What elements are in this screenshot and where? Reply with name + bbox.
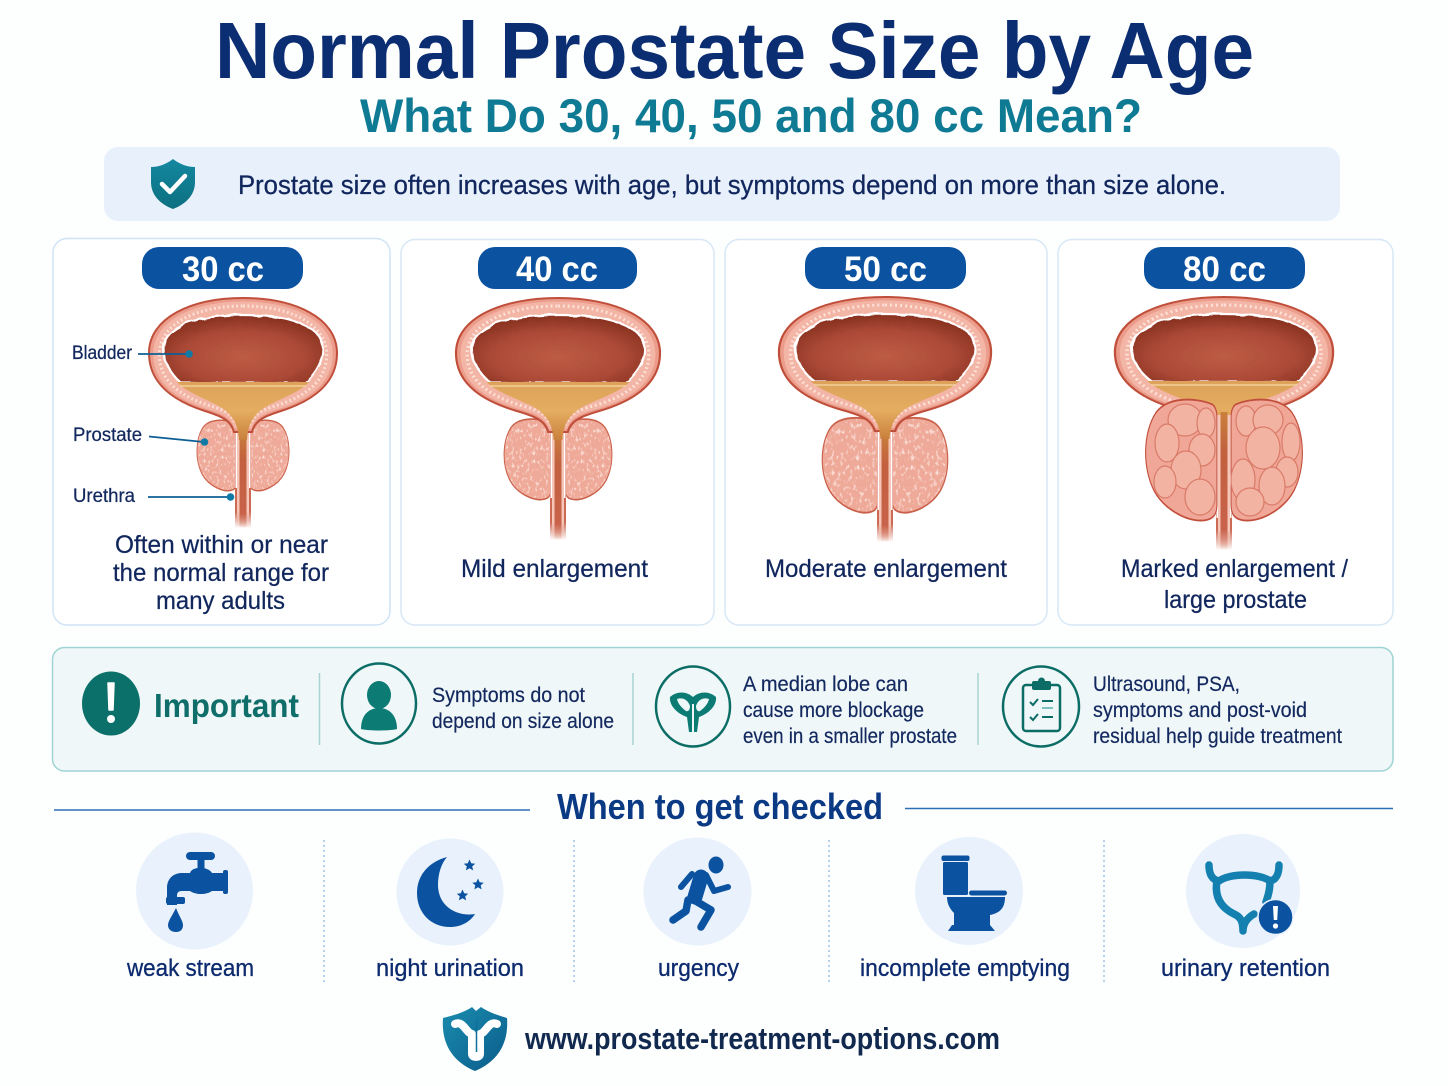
panel: 80 cc [1058,240,1393,625]
badge: 30 cc: 30 cc [182,250,264,289]
caption: 50 cc: Moderate enlargement [765,555,1007,583]
label: prostate: Prostate [73,425,142,446]
label: night urination [376,955,524,982]
heading: when to get checked: When to get checked [557,786,883,827]
text: diagnostics: residual help guide treatment [1093,725,1342,748]
label: urethra: Urethra [73,486,135,507]
label: urgency [658,955,739,982]
icon: logo shield [443,1007,507,1071]
caption: 80 cc: large prostate [1164,586,1307,614]
badge: 30 cc [142,247,303,289]
title: Normal Prostate Size by Age [215,6,1254,95]
symptom: weak stream [126,832,254,982]
label: urethra [73,486,234,507]
footer [443,1007,1000,1071]
text: symptoms: depend on size alone [432,710,614,733]
illustration: 30 cc prostate [149,298,337,528]
badge: 40 cc: 40 cc [516,250,598,289]
text: symptoms: Symptoms do not [432,684,585,707]
text: diagnostics: Ultrasound, PSA, [1093,673,1240,696]
caption: 30 cc: many adults [156,587,285,615]
icon: median lobe [656,666,730,746]
text: median lobe: A median lobe can [743,673,908,696]
illustration: 40 cc prostate [456,298,660,540]
icon: runner [644,838,752,946]
symptom: night urination [376,838,524,982]
illustration: 50 cc prostate [779,297,991,542]
badge: 50 cc: 50 cc [844,250,927,289]
icon: faucet [136,832,253,950]
badge: 80 cc [1144,247,1305,289]
label: weak stream [126,955,254,982]
icon: toilet [915,837,1023,945]
caption: 30 cc: the normal range for [113,559,329,587]
symptom: incomplete emptying [860,837,1070,982]
label: incomplete emptying [860,955,1070,982]
text: diagnostics [1093,673,1342,748]
panel: 30 cc [53,238,390,625]
label: prostate [73,425,208,446]
subtitle: What Do 30, 40, 50 and 80 cc Mean? [360,89,1142,142]
icon: shield check [151,159,195,209]
icon: clipboard [1003,666,1079,746]
key message banner [104,147,1340,221]
text: median lobe: even in a smaller prostate [743,725,957,748]
label: bladder [72,343,193,364]
label: urinary retention [1161,955,1330,982]
text: symptoms [432,684,614,733]
panel: important [52,648,1393,771]
caption: 80 cc: Marked enlargement / [1121,555,1348,583]
panel: 50 cc [725,240,1047,625]
panel: 40 cc [401,240,714,625]
label: bladder: Bladder [72,343,133,364]
caption: 30 cc: Often within or near [115,531,328,559]
icon: moon and stars [396,838,504,946]
caption: 30 cc [113,531,329,615]
symptom: urgency [644,838,752,982]
text: diagnostics: symptoms and post-void [1093,699,1307,722]
icon: person [342,664,416,744]
caption: 80 cc [1121,555,1348,614]
text: median lobe: cause more blockage [743,699,924,722]
icon: bladder alert [1186,834,1300,948]
text: median lobe [743,673,957,748]
symptom: urinary retention [1161,834,1330,982]
badge: 50 cc [805,247,966,289]
badge: 80 cc: 80 cc [1183,250,1266,289]
caption: 40 cc: Mild enlargement [461,555,648,583]
heading: important: Important [154,687,299,724]
illustration: 80 cc prostate [1115,297,1333,550]
icon: exclamation [82,672,140,736]
website: www.prostate-treatment-options.com [524,1021,1000,1056]
banner text: Prostate size often increases with age, but symptoms depend on more than size alone. [238,170,1226,200]
badge: 40 cc [478,247,637,289]
